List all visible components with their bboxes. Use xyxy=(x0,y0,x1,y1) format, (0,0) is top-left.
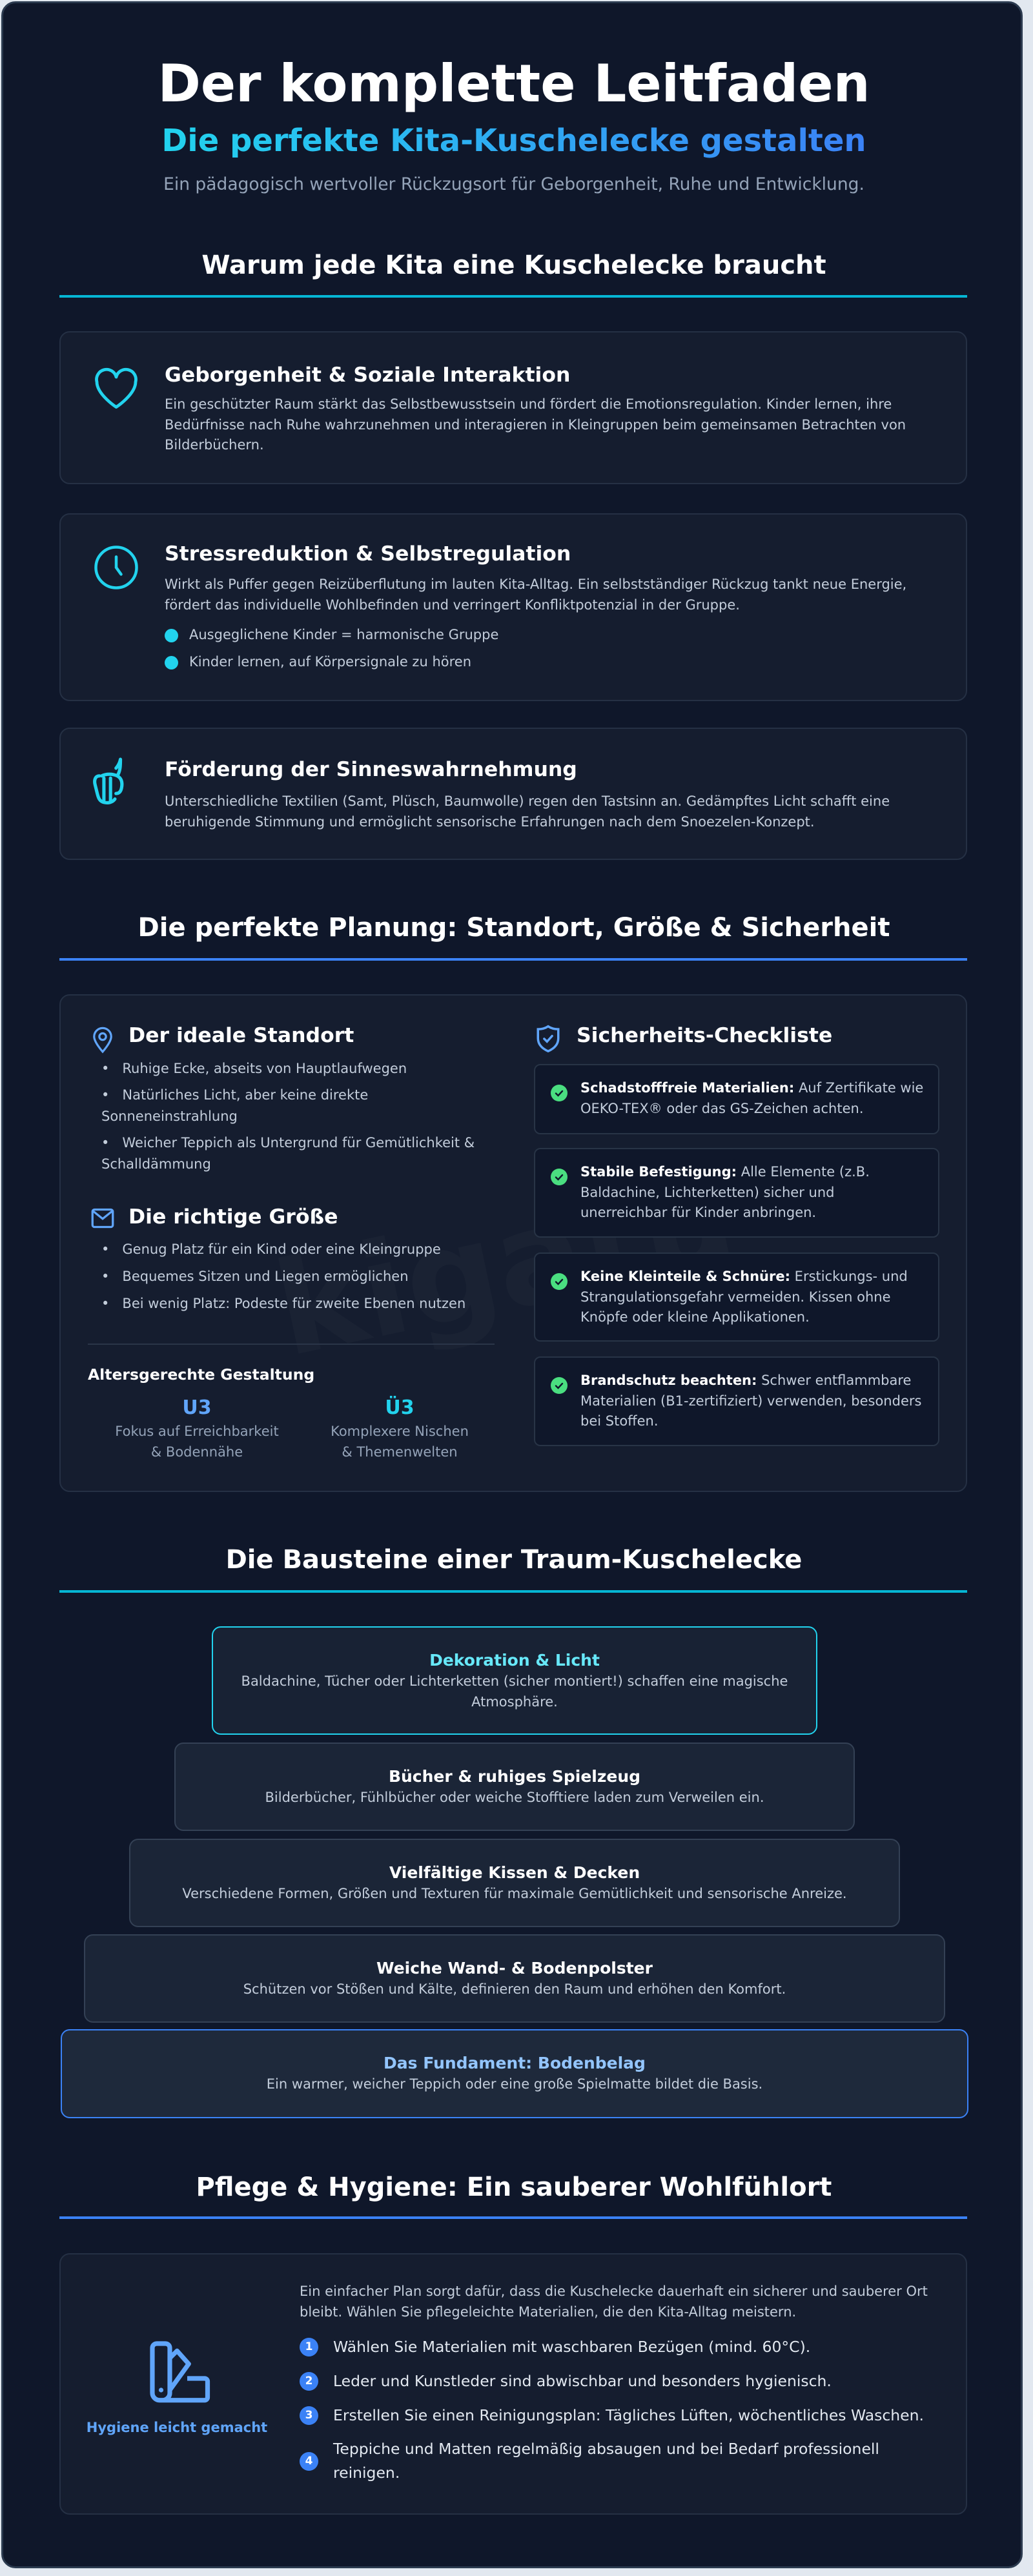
header xyxy=(158,54,870,194)
checklist item 2: Stabile Befestigung: Alle Elemente (z.B. xyxy=(580,1164,870,1180)
text: Geborgenheit xyxy=(165,396,906,453)
heading: Größe: Die richtige Größe xyxy=(128,1205,338,1229)
layer: Dekoration xyxy=(212,1626,817,1735)
numbered list: 4 xyxy=(305,2455,312,2468)
Ü3 xyxy=(331,1396,469,1460)
panel: Planung xyxy=(59,994,967,1492)
checklist item 3: Keine Kleinteile & Schnüre: Erstickungs- und xyxy=(580,1269,908,1284)
numbered list: 1 xyxy=(305,2340,312,2353)
text: Sinneswahrnehmung xyxy=(165,793,890,829)
title: Der komplette Leitfaden xyxy=(158,54,870,114)
text: Sinneswahrnehmung: beruhigende Stimmung und ermöglicht sensorische Erfahrungen nach dem Snoezelen-Konzept. xyxy=(165,813,815,829)
icon: shield xyxy=(537,1025,559,1052)
list: Standort: Sonneneinstrahlung xyxy=(101,1109,238,1124)
list: Größe: • Genug Platz für ein Kind oder eine Kleingruppe xyxy=(101,1242,441,1257)
checklist item 1 xyxy=(534,1064,939,1134)
Ü3: & Themenwelten xyxy=(342,1444,458,1460)
intro text: Ein einfacher Plan sorgt dafür, dass die Kuschelecke dauerhaft ein sicherer und sauberer Ort xyxy=(300,2284,928,2299)
panel: Geborgenheit xyxy=(59,331,967,484)
numbered list: Teppiche und Matten regelmäßig absaugen und bei Bedarf professionell xyxy=(333,2440,879,2458)
text: Geborgenheit: Bilderbüchern. xyxy=(165,437,264,453)
layer: Fundament: Ein warmer, weicher Teppich oder eine große Spielmatte bildet die Basis. xyxy=(267,2076,762,2092)
layer: Bücher: Bücher & ruhiges Spielzeug xyxy=(389,1767,640,1786)
icon: swatch xyxy=(150,2341,210,2403)
layer: Dekoration: Baldachine, Tücher oder Lichterketten (sicher montiert!) schaffen eine magische xyxy=(241,1673,788,1689)
layer: Kissen xyxy=(129,1839,900,1927)
layer: Polster: Schützen vor Stößen und Kälte, definieren den Raum und erhöhen den Komfort. xyxy=(243,1981,786,1997)
list: Standort: Schalldämmung xyxy=(101,1156,211,1172)
heading: Altersgerechte: Altersgerechte Gestaltung xyxy=(88,1365,314,1384)
checklist item 4 xyxy=(534,1356,939,1446)
heading: Planung: Die perfekte Planung: Standort, Größe & Sicherheit xyxy=(138,913,890,943)
list: Größe: • Bei wenig Platz: Podeste für zweite Ebenen nutzen xyxy=(101,1296,465,1311)
block: Altersgerechte Gestaltung xyxy=(88,1365,469,1460)
layer: Dekoration: Dekoration & Licht xyxy=(429,1651,600,1670)
text: Stressreduktion: Wirkt als Puffer gegen Reizüberflutung im lauten Kita-Alltag. Ein selbstständiger Rückzug tankt neue Energie, xyxy=(165,577,906,592)
numbered list: Wählen Sie Materialien mit waschbaren Bezügen (mind. 60°C). xyxy=(333,2338,810,2356)
label: Hygiene leicht gemacht: Hygiene leicht gemacht xyxy=(87,2420,267,2435)
list: Größe: • Bequemes Sitzen und Liegen ermöglichen xyxy=(101,1269,409,1284)
pyramid xyxy=(61,1626,968,2118)
icon: clock xyxy=(94,546,138,589)
panel: Sinneswahrnehmung xyxy=(59,728,967,860)
tagline: Ein pädagogisch wertvoller Rückzugsort für Geborgenheit, Ruhe und Entwicklung. xyxy=(163,174,864,194)
heading: Standort: Der ideale Standort xyxy=(128,1024,354,1047)
checklist item 1: Schadstofffreie Materialien: Auf Zertifikate wie xyxy=(580,1080,923,1096)
text: Sinneswahrnehmung: Unterschiedliche Textilien (Samt, Plüsch, Baumwolle) regen den Tastsinn an. Gedämpftes Licht schafft eine xyxy=(165,793,890,809)
heading: Warum: Warum jede Kita eine Kuschelecke braucht xyxy=(201,250,826,280)
layer: Polster xyxy=(84,1934,945,2023)
heading: Stressreduktion: Stressreduktion & Selbstregulation xyxy=(165,542,571,566)
panel: Stressreduktion xyxy=(59,513,967,701)
bullet list: Kinder lernen, auf Körpersignale zu hören xyxy=(189,654,471,670)
layer: Kissen: Vielfältige Kissen & Decken xyxy=(389,1863,640,1882)
checklist item 2 xyxy=(534,1148,939,1238)
text: Stressreduktion xyxy=(165,577,906,612)
layer: Fundament xyxy=(61,2029,968,2118)
checklist item 2: unerreichbar für Kinder anbringen. xyxy=(580,1205,816,1220)
heading: Geborgenheit: Geborgenheit & Soziale Interaktion xyxy=(165,363,570,387)
text: Geborgenheit: Ein geschützter Raum stärkt das Selbstbewusstsein und fördert die Emotionsregulation. Kinder lernen, ihre xyxy=(165,396,892,412)
bullet list xyxy=(165,627,498,670)
numbered list: Erstellen Sie einen Reinigungsplan: Tägliches Lüften, wöchentliches Waschen. xyxy=(333,2406,924,2424)
list: Standort: • Natürliches Licht, aber keine direkte xyxy=(101,1087,368,1103)
checklist item 2: Baldachine, Lichterketten) sicher und xyxy=(580,1184,834,1200)
numbered list: reinigen. xyxy=(333,2464,400,2482)
subtitle: Die perfekte Kita-Kuschelecke gestalten xyxy=(161,123,866,159)
list: Standort: • Ruhige Ecke, abseits von Hauptlaufwegen xyxy=(101,1061,407,1076)
checklist item 4: bei Stoffen. xyxy=(580,1413,659,1429)
heading: Sicherheits-Checkliste: Sicherheits-Checkliste xyxy=(577,1024,832,1047)
watermark: kigatu xyxy=(263,1143,748,1386)
checklist item 3 xyxy=(534,1252,939,1342)
text: Stressreduktion: fördert das individuelle Wohlbefinden und verringert Konfliktpotenzial in der Gruppe. xyxy=(165,597,740,612)
heading: Pflege: Pflege & Hygiene: Ein sauberer Wohlfühlort xyxy=(196,2172,832,2202)
panel: Pflege xyxy=(59,2253,967,2515)
list: Standort xyxy=(101,1061,475,1172)
Ü3: Ü3 xyxy=(385,1396,414,1419)
list: Größe xyxy=(101,1242,465,1311)
layer: Bücher: Bilderbücher, Fühlbücher oder weiche Stofftiere laden zum Verweilen ein. xyxy=(265,1790,764,1805)
layer: Kissen: Verschiedene Formen, Größen und Texturen für maximale Gemütlichkeit und sensorische Anreize. xyxy=(182,1886,847,1901)
checklist item 4: Brandschutz beachten: Schwer entflammbare xyxy=(580,1373,911,1388)
layer: Bücher xyxy=(174,1743,855,1831)
U3: & Bodennähe xyxy=(151,1444,243,1460)
icon: hand xyxy=(93,758,124,804)
checklist item 3: Knöpfe oder kleine Applikationen. xyxy=(580,1309,810,1325)
intro text xyxy=(300,2284,928,2319)
layer: Dekoration: Atmosphäre. xyxy=(471,1694,558,1710)
list: Standort: • Weicher Teppich als Untergrund für Gemütlichkeit & xyxy=(101,1135,475,1150)
bullet list: Ausgeglichene Kinder = harmonische Gruppe xyxy=(189,627,498,642)
Ü3: Komplexere Nischen xyxy=(331,1424,469,1439)
numbered list: Leder und Kunstleder sind abwischbar und besonders hygienisch. xyxy=(333,2372,832,2390)
checklist item 4: Materialien (B1-zertifiziert) verwenden, besonders xyxy=(580,1393,921,1409)
intro text: bleibt. Wählen Sie pflegeleichte Materialien, die den Kita-Alltag meistern. xyxy=(300,2304,796,2319)
text: Geborgenheit: Bedürfnisse nach Ruhe wahrzunehmen und interagieren in Kleingruppen beim gemeinsamen Betrachten von xyxy=(165,417,906,433)
heading: Sinneswahrnehmung: Förderung der Sinneswahrnehmung xyxy=(165,758,577,781)
U3: U3 xyxy=(182,1396,212,1419)
U3: Fokus auf Erreichbarkeit xyxy=(115,1424,279,1439)
heading: Bausteine: Die Bausteine einer Traum-Kuschelecke xyxy=(226,1545,802,1575)
checklist item 1: OEKO-TEX® oder das GS-Zeichen achten. xyxy=(580,1100,864,1116)
icon: heart xyxy=(95,368,138,409)
U3 xyxy=(115,1396,279,1460)
layer: Polster: Weiche Wand- & Bodenpolster xyxy=(376,1959,653,1978)
layer: Fundament: Das Fundament: Bodenbelag xyxy=(384,2054,646,2072)
numbered list xyxy=(300,2338,924,2482)
numbered list: 2 xyxy=(305,2375,312,2387)
icon: location pin xyxy=(93,1027,112,1054)
checklist item 3: Strangulationsgefahr vermeiden. Kissen ohne xyxy=(580,1289,891,1304)
icon: envelope xyxy=(92,1209,114,1228)
numbered list: 3 xyxy=(305,2409,312,2422)
